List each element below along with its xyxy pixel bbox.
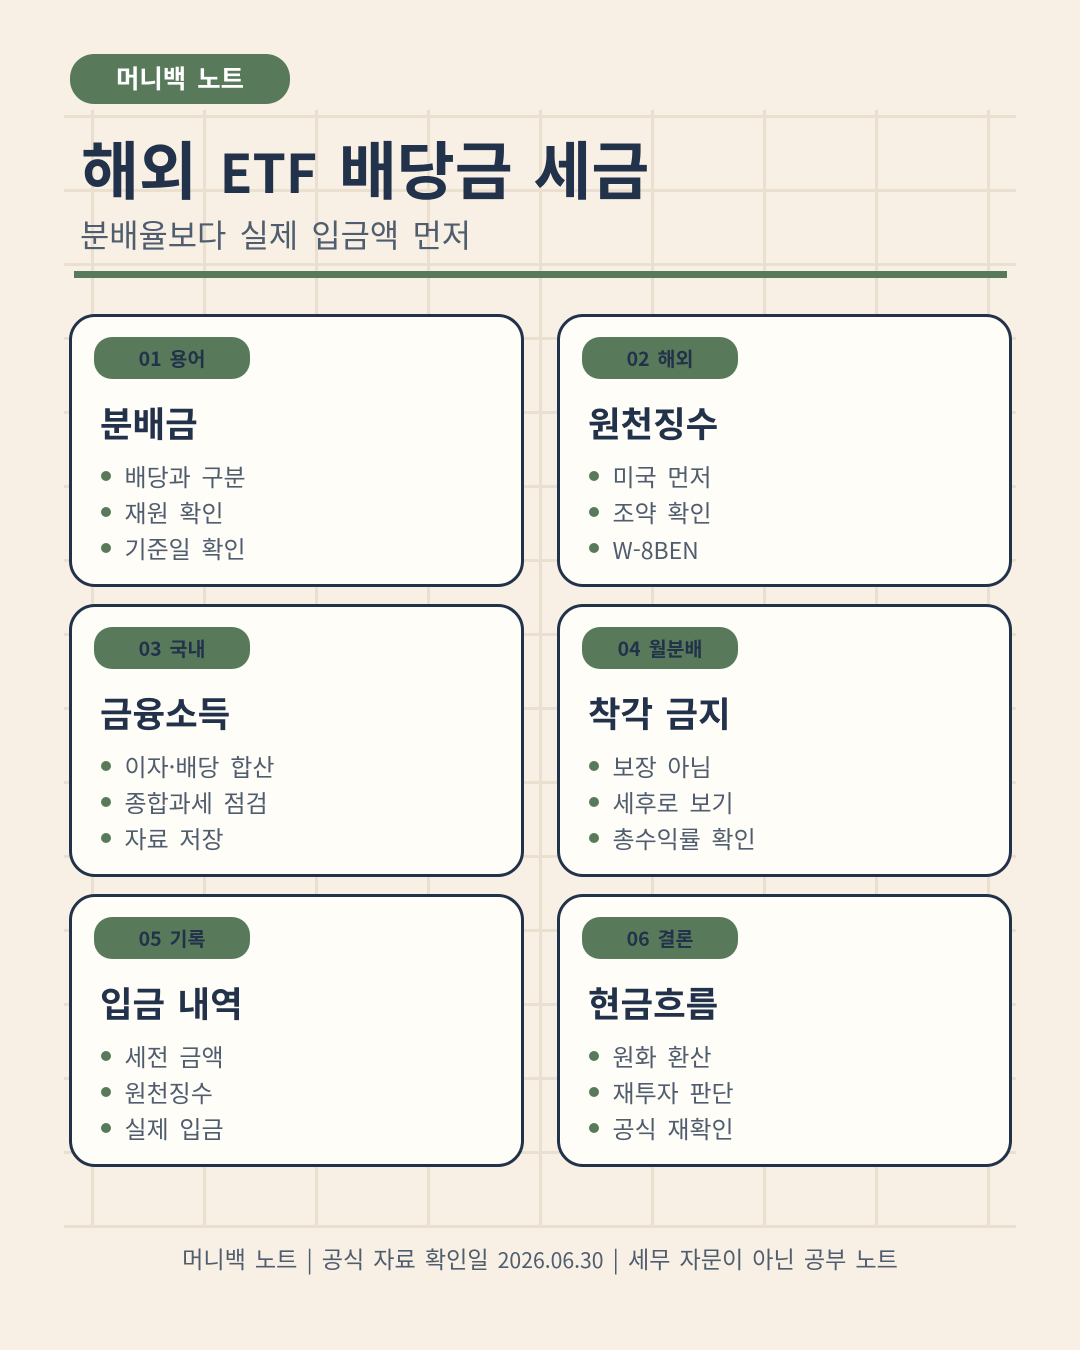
bullets: 공식 재확인 — [612, 1110, 734, 1145]
bullets: 실제 입금 — [124, 1110, 224, 1145]
bullets: 원천징수 — [124, 1074, 213, 1109]
bullets: 세후로 보기 — [612, 784, 734, 819]
bullets — [589, 458, 712, 566]
heading: 분배금 — [100, 397, 198, 448]
tag: 05 기록 — [139, 923, 205, 952]
tag: 01 용어 — [139, 343, 205, 372]
panel: 06 — [557, 894, 1012, 1167]
tag — [94, 627, 250, 669]
panel: 03 — [69, 604, 524, 877]
bullets — [589, 748, 756, 855]
bullets: 세전 금액 — [124, 1038, 224, 1073]
bullets: 총수익률 확인 — [612, 820, 756, 855]
bullets: 재원 확인 — [124, 494, 224, 529]
bullets: 자료 저장 — [124, 820, 224, 855]
bullets: 원화 환산 — [612, 1038, 712, 1073]
brand badge: 머니백 노트 — [116, 60, 244, 96]
title: 해외 ETF 배당금 세금 — [81, 122, 649, 213]
panel: 05 — [69, 894, 524, 1167]
tag — [582, 337, 738, 379]
bullets — [101, 748, 274, 855]
bullets: W-8BEN — [612, 532, 699, 566]
heading: 금융소득 — [100, 687, 230, 738]
bullets — [589, 1038, 734, 1145]
header rule — [74, 271, 1007, 278]
bullets: 조약 확인 — [612, 494, 712, 529]
footer: 머니백 노트 | 공식 자료 확인일 2026.06.30 | 세무 자문이 아닌 공부 노트 — [182, 1241, 898, 1275]
subtitle: 분배율보다 실제 입금액 먼저 — [80, 211, 471, 257]
bullets: 미국 먼저 — [612, 458, 712, 493]
bullets: 이자·배당 합산 — [124, 748, 274, 783]
tag: 04 월분배 — [618, 633, 702, 662]
tag — [94, 917, 250, 959]
panel: 02 — [557, 314, 1012, 587]
brand badge — [70, 54, 290, 104]
tag: 03 국내 — [139, 633, 205, 662]
tag: 02 해외 — [627, 343, 693, 372]
bullets — [101, 1038, 224, 1145]
heading: 착각 금지 — [588, 687, 731, 738]
heading: 원천징수 — [588, 397, 718, 448]
panel: 01 — [69, 314, 524, 587]
bullets: 보장 아님 — [612, 748, 712, 783]
heading: 입금 내역 — [100, 977, 243, 1028]
tag: 06 결론 — [627, 923, 693, 952]
bullets: 배당과 구분 — [124, 458, 246, 493]
bullets: 종합과세 점검 — [124, 784, 268, 819]
bullets: 기준일 확인 — [124, 530, 246, 565]
panel: 04 — [557, 604, 1012, 877]
bullets: 재투자 판단 — [612, 1074, 734, 1109]
tag — [582, 917, 738, 959]
tag — [582, 627, 738, 669]
heading: 현금흐름 — [588, 977, 718, 1028]
bullets — [101, 458, 246, 565]
tag — [94, 337, 250, 379]
